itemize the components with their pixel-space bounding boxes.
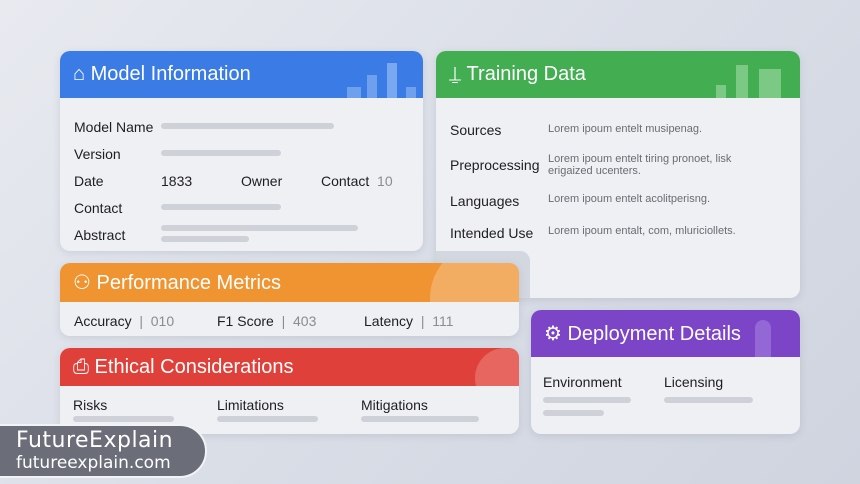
panel: training data: Preprocessing bbox=[450, 157, 540, 173]
watermark bbox=[0, 424, 207, 478]
panel: training data: erigaized ucenters. bbox=[548, 165, 641, 177]
header: deployment details: ⚙ Deployment Details bbox=[544, 323, 741, 345]
panel: model information: Contact bbox=[74, 200, 122, 216]
panel: model information bbox=[60, 51, 423, 251]
header: performance metrics bbox=[60, 263, 519, 302]
panel: deployment details: Environment bbox=[543, 374, 622, 390]
panel: model information: Model Name bbox=[74, 119, 153, 135]
panel: training data: Lorem ipoum entalt, com, mluriciollets. bbox=[548, 225, 736, 237]
header: model information: ⌂ Model Information bbox=[73, 63, 251, 85]
panel: performance metrics: Accuracy | 010 bbox=[74, 313, 174, 329]
panel: training data: Lorem ipoum entelt musipenag. bbox=[548, 123, 702, 135]
panel: model information: Contact 10 bbox=[321, 173, 393, 189]
panel: performance metrics bbox=[60, 263, 519, 336]
panel: model information: Owner bbox=[241, 173, 282, 189]
header: ethical considerations bbox=[60, 348, 519, 386]
panel: training data: Lorem ipoum entelt acolitperisng. bbox=[548, 193, 710, 205]
panel: performance metrics: F1 Score | 403 bbox=[217, 313, 316, 329]
header: performance metrics: ⚇ Performance Metrics bbox=[73, 272, 281, 294]
header: training data: ⍊ Training Data bbox=[449, 63, 586, 85]
panel: ethical considerations: Mitigations bbox=[361, 397, 428, 413]
panel: model information: 1833 bbox=[161, 173, 192, 189]
panel: deployment details: Licensing bbox=[664, 374, 723, 390]
panel: training data: Sources bbox=[450, 122, 501, 138]
panel: training data bbox=[436, 51, 800, 298]
header: ethical considerations: ⎙ Ethical Considerations bbox=[73, 356, 294, 378]
panel: training data: Languages bbox=[450, 193, 519, 209]
panel: ethical considerations: Limitations bbox=[217, 397, 284, 413]
panel: deployment details bbox=[531, 310, 800, 434]
panel: model information: Version bbox=[74, 146, 121, 162]
panel: ethical considerations bbox=[60, 348, 519, 434]
panel: model information: Date bbox=[74, 173, 104, 189]
header: deployment details bbox=[531, 310, 800, 357]
watermark: futureexplain.com bbox=[16, 453, 171, 473]
header: training data bbox=[436, 51, 800, 98]
panel: training data: Lorem ipoum entelt tiring pronoet, lisk bbox=[548, 153, 731, 165]
header: model information bbox=[60, 51, 423, 98]
panel: performance metrics: Latency | 111 bbox=[364, 313, 454, 329]
panel: ethical considerations: Risks bbox=[73, 397, 107, 413]
panel: model information: Abstract bbox=[74, 227, 125, 243]
watermark: FutureExplain bbox=[16, 428, 173, 453]
panel: training data: Intended Use bbox=[450, 225, 533, 241]
